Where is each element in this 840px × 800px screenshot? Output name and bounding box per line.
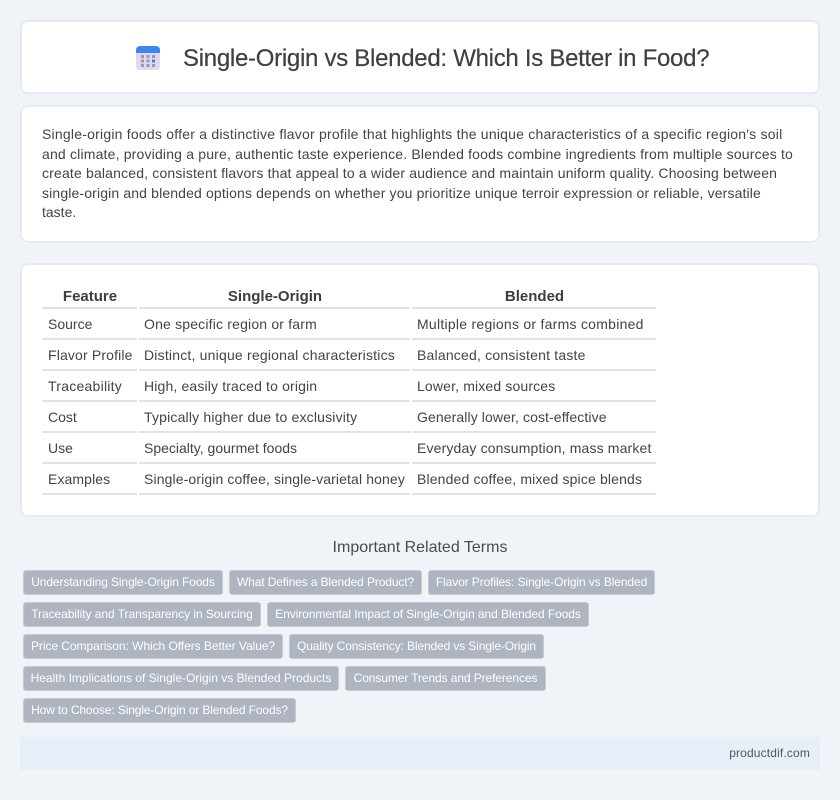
related term tags: Quality Consistency: Blended vs Single-Origin [297,639,536,653]
table header: Feature [63,288,117,305]
text block: intro paragraph: taste. [42,204,76,220]
row: flavor profile: Flavor Profile [48,347,133,363]
row: use: Specialty, gourmet foods [144,440,297,456]
related term tags: Price Comparison: Which Offers Better Value? [31,639,275,653]
related term tags [23,570,655,723]
row: traceability: High, easily traced to origin [144,378,317,394]
header panel [20,20,820,94]
related term tags: Flavor Profiles: Single-Origin vs Blended [436,575,647,589]
related term tags: What Defines a Blended Product? [237,575,414,589]
comparison table [42,288,656,495]
text block: intro paragraph: and climate, providing a pure, authentic taste experience. Blended foods combine ingredients from multiple sources to [42,146,793,162]
row: use: Use [48,440,73,456]
related term tags: Consumer Trends and Preferences [354,671,537,685]
related term tags: Traceability and Transparency in Sourcing [31,607,253,621]
row: cost: Cost [48,409,77,425]
row: source: Source [48,316,92,332]
table header: Single-Origin [228,288,322,305]
row: traceability [42,378,656,402]
related term tags: Health Implications of Single-Origin vs Blended Products [31,671,331,685]
row: examples [42,471,656,495]
icon: calendar grid [136,46,160,70]
footer bar [20,737,820,770]
related term tags: How to Choose: Single-Origin or Blended Foods? [31,703,288,717]
row: traceability: Lower, mixed sources [417,378,555,394]
related term tags: Environmental Impact of Single-Origin and Blended Foods [275,607,581,621]
text block: intro paragraph: single-origin and blended options depends on whether you prioritize unique terroir expression or reliable, versatile [42,184,761,200]
row: examples: Examples [48,471,110,487]
row: flavor profile: Balanced, consistent taste [417,347,586,363]
row: source: Multiple regions or farms combined [417,316,644,332]
title: Single-Origin vs Blended: Which Is Better in Food? [183,45,709,72]
row: cost [42,409,656,433]
text block: intro paragraph: create balanced, consistent flavors that appeal to a wider audience and maintain uniform quality. Choosing between [42,165,777,181]
row: flavor profile: Distinct, unique regional characteristics [144,347,395,363]
row: cost: Typically higher due to exclusivity [144,409,357,425]
row: use: Everyday consumption, mass market [417,440,651,456]
text block: intro paragraph: Single-origin foods offer a distinctive flavor profile that highlights the unique characteristics of a specific region's soil [42,126,782,142]
row: source: One specific region or farm [144,316,317,332]
heading: important related terms: Important Related Terms [333,539,507,556]
row: source [42,316,656,340]
panel: comparison table [20,263,820,517]
related term tags: Understanding Single-Origin Foods [31,575,215,589]
text block: intro paragraph [42,126,793,220]
row: examples: Single-origin coffee, single-varietal honey [144,471,405,487]
row: use [42,440,656,464]
table header: Blended [505,288,564,305]
table header [42,288,656,309]
panel: intro paragraph [20,105,820,243]
row: examples: Blended coffee, mixed spice blends [417,471,642,487]
footer source text: productdif.com [729,746,810,760]
row: traceability: Traceability [48,378,122,394]
row: cost: Generally lower, cost-effective [417,409,607,425]
row: flavor profile [42,347,656,371]
